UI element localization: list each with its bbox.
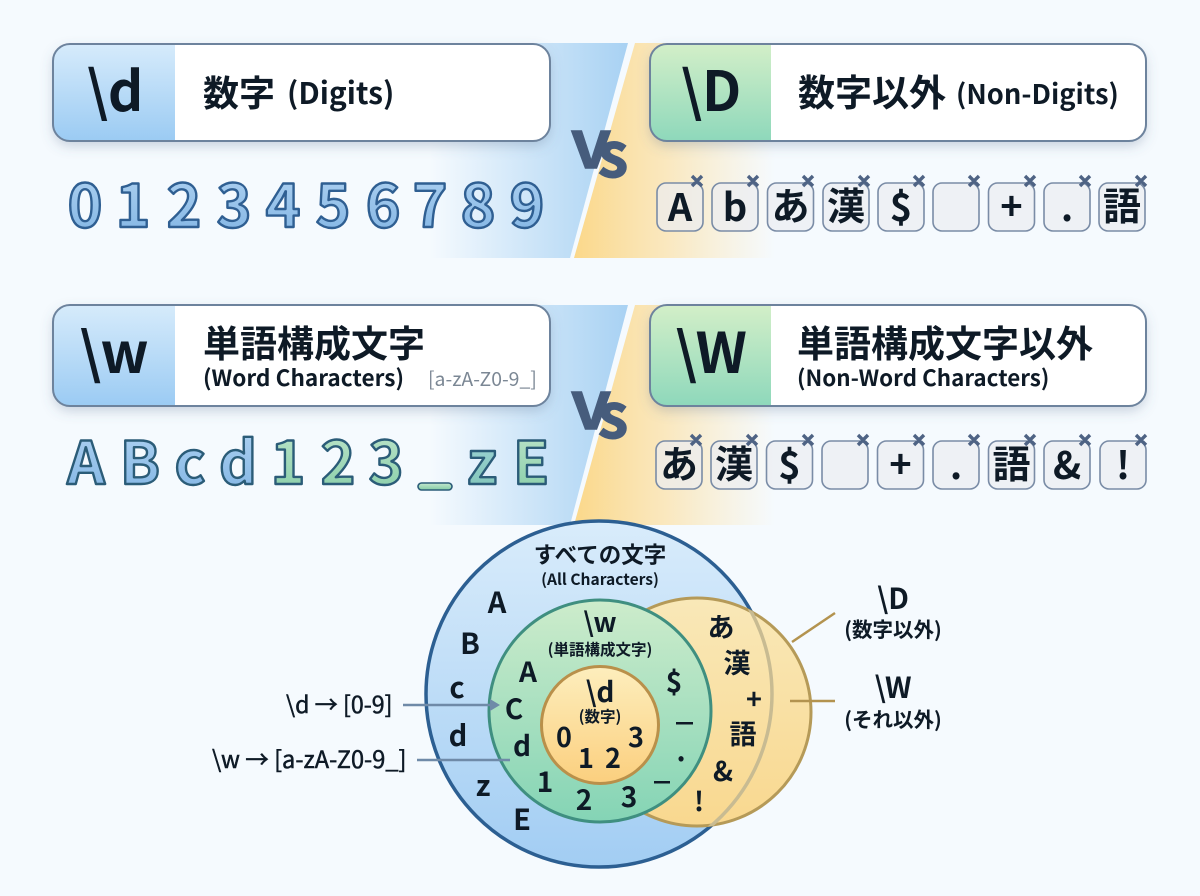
label: \w: (単語構成文字) [548, 638, 652, 660]
card: \W non-word characters: (Non-Word Characters) [797, 361, 1049, 393]
outer letters: A [487, 580, 507, 622]
callout: \W: \W [874, 665, 912, 707]
VS label: word [571, 366, 628, 456]
word characters row: 3 [369, 416, 403, 501]
digits row 0-9: 4 [266, 159, 300, 244]
word circle characters: A [518, 651, 538, 691]
digits row 0-9: 9 [510, 159, 544, 244]
callout: \D: \D [877, 576, 909, 618]
non-digit character boxes: + [1000, 176, 1023, 231]
non-word character boxes: $ [778, 435, 801, 490]
card: \D non-digits: 数字以外 [798, 63, 946, 117]
yellow circle characters [694, 606, 762, 819]
word circle characters: C [505, 688, 523, 728]
word circle characters: 2 [576, 779, 592, 819]
digits row 0-9 [68, 159, 544, 244]
label: \d: \d [586, 671, 614, 711]
split band: word comparison [430, 305, 775, 525]
VS label: digits: V [571, 111, 610, 183]
outer letters: c [449, 665, 465, 707]
callout: \w range: \w → [a-zA-Z0-9_] [212, 741, 407, 775]
card: \d digits: \d [87, 47, 143, 127]
callout: \W [790, 665, 942, 733]
digits row 0-9: 1 [116, 159, 150, 244]
word characters row: z [467, 416, 497, 501]
digits row 0-9: 6 [366, 159, 400, 244]
card: \D non-digits [650, 44, 1146, 141]
card: \d digits: (Digits) [287, 69, 394, 113]
yellow circle characters: ! [694, 780, 704, 819]
digit circle numbers [556, 716, 644, 776]
VS label: word: V [571, 372, 610, 444]
card: \w word characters: (Word Characters) [203, 360, 404, 393]
word circle characters: $ [666, 661, 682, 701]
digit circle numbers: 1 [578, 737, 594, 776]
digit circle numbers: 0 [556, 716, 572, 755]
VS label: digits [571, 105, 628, 195]
word characters row: c [174, 416, 206, 501]
callout: \W: (それ以外) [844, 703, 942, 733]
digit circle numbers: 2 [605, 737, 621, 776]
digits row 0-9: 0 [68, 159, 102, 244]
card: \w word characters: 単語構成文字 [203, 314, 425, 368]
word circle characters [505, 651, 693, 819]
word characters row [66, 416, 549, 501]
callout: \d range: \d → [0-9] [286, 686, 392, 720]
outer letters [449, 580, 531, 839]
non-digit character boxes: A [667, 177, 693, 232]
label: all characters: (All Characters) [541, 568, 659, 590]
non-digit character boxes [657, 176, 1146, 232]
yellow circle characters: 漢 [724, 642, 750, 681]
card: \d digits: 数字 [203, 65, 275, 117]
yellow circle characters: 語 [730, 713, 756, 752]
yellow circle characters: + [746, 678, 762, 717]
digits row 0-9: 2 [167, 159, 201, 244]
non-word character boxes: ! [1116, 435, 1130, 490]
digit circle numbers: 3 [628, 716, 644, 755]
label: \d [579, 671, 621, 727]
card: \D non-digits: \D [681, 47, 741, 127]
circle: non-digit / non-word [583, 598, 811, 826]
word characters row: d [219, 416, 257, 501]
non-digit character boxes: 漢 [827, 176, 865, 231]
outer letters: E [513, 797, 531, 839]
word characters row: A [66, 416, 106, 501]
callout: \D: (数字以外) [844, 613, 942, 643]
outer letters: d [449, 713, 467, 755]
non-digit character boxes: 語 [1103, 176, 1141, 231]
label: all characters: すべての文字 [534, 538, 666, 570]
card: \W non-word characters: 単語構成文字以外 [797, 314, 1093, 368]
non-word character boxes: & [1053, 435, 1081, 490]
word characters row: 1 [271, 416, 305, 501]
circle: digits [542, 666, 658, 784]
non-digit character boxes: b [723, 177, 747, 232]
circle: word characters [489, 600, 711, 822]
word characters row: E [513, 416, 549, 501]
card: \d digits [53, 44, 550, 141]
non-word character boxes: 語 [992, 434, 1031, 489]
non-word character boxes: . [950, 435, 962, 490]
split band: digits comparison [430, 43, 775, 258]
card: \w word characters: [a-zA-Z0-9_] [428, 363, 537, 392]
outer letters: B [460, 621, 480, 663]
label: \w [548, 601, 652, 660]
digits row 0-9: 3 [217, 159, 251, 244]
word circle characters: d [513, 725, 531, 765]
non-word character boxes: あ [660, 434, 698, 489]
word characters row: 2 [321, 416, 355, 501]
outer letters: z [476, 763, 491, 805]
non-digit character boxes: . [1061, 177, 1073, 232]
callout: \d range [286, 686, 500, 720]
label: all characters [534, 538, 666, 590]
word circle characters: 1 [537, 761, 553, 801]
digits row 0-9: 5 [316, 159, 350, 244]
yellow circle characters: あ [708, 606, 734, 645]
word circle characters: . [676, 730, 686, 770]
digits row 0-9: 8 [461, 159, 495, 244]
card: \D non-digits: (Non-Digits) [956, 72, 1119, 112]
card: \w word characters: \w [79, 309, 149, 390]
overlap edge of all-characters circle [708, 608, 774, 826]
yellow circle characters: & [713, 750, 733, 789]
card: \w word characters [53, 305, 550, 406]
label: \d: (数字) [579, 705, 621, 727]
non-word character boxes: + [889, 434, 912, 489]
non-word character boxes [656, 434, 1146, 490]
venn diagram [426, 521, 811, 867]
callout: \D [792, 576, 942, 643]
card: \W non-word characters [650, 305, 1146, 406]
card: \W non-word characters: \W [675, 309, 747, 390]
digits row 0-9: 7 [413, 159, 447, 244]
non-digit character boxes: あ [771, 176, 810, 231]
VS label: digits: s [598, 105, 628, 195]
non-word character boxes: 漢 [715, 434, 753, 489]
non-digit character boxes: $ [890, 177, 912, 232]
word characters row: B [120, 416, 160, 501]
word circle characters: 3 [621, 776, 637, 816]
circle: all characters [426, 521, 772, 867]
label: \w: \w [583, 601, 617, 640]
VS label: word: s [598, 366, 628, 456]
